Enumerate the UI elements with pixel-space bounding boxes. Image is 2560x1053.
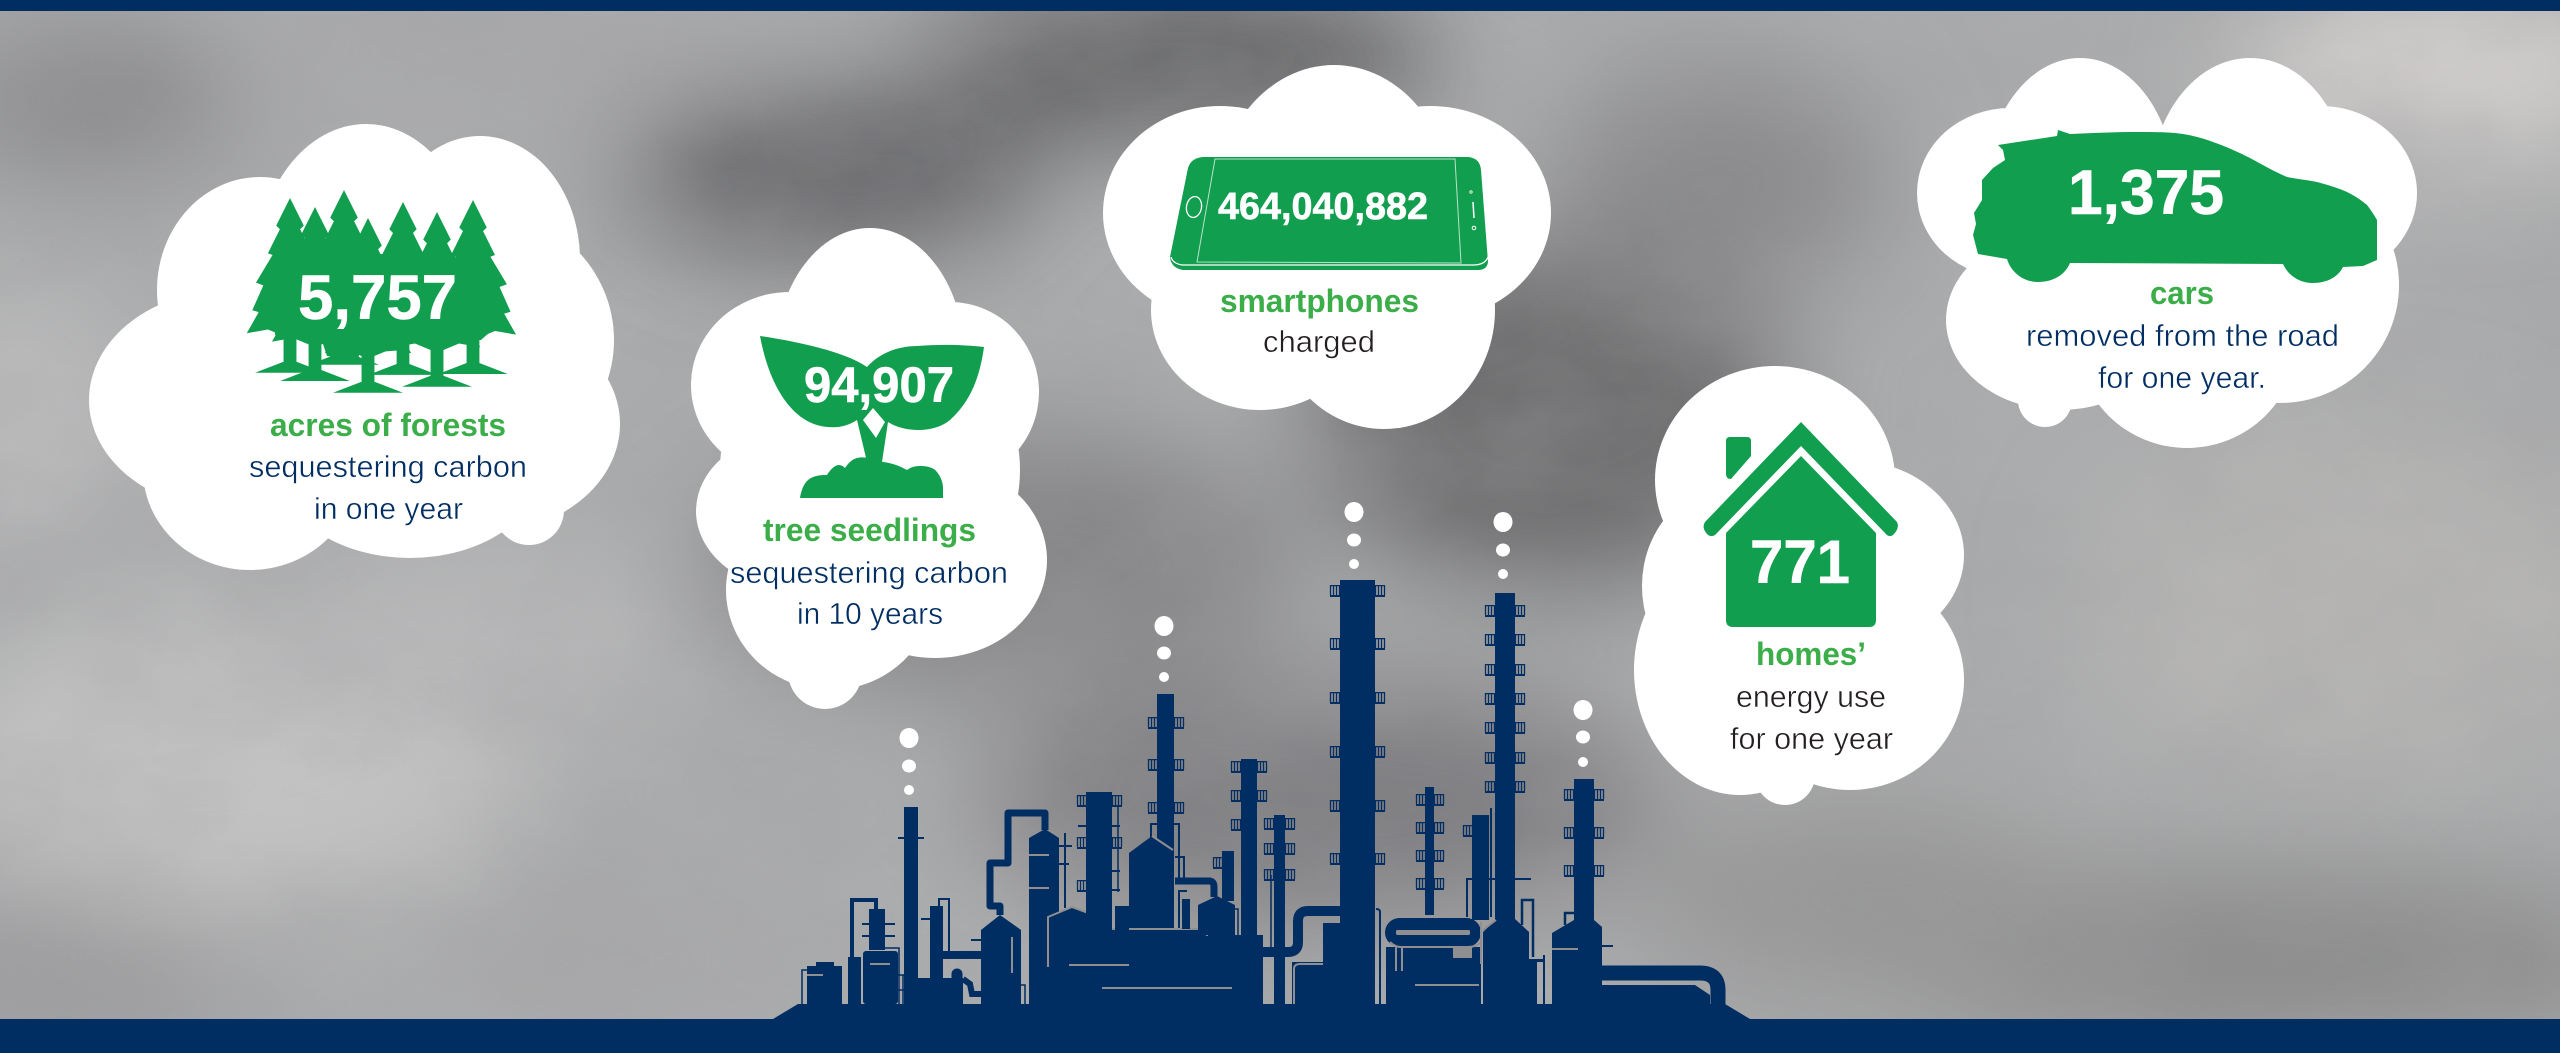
- text: sequestering carbon: sequestering carbon: [730, 555, 1008, 590]
- icon: car silhouette: [1973, 130, 2377, 283]
- icon: house: [1704, 422, 1898, 627]
- cloud shape: homes: [1634, 366, 1964, 805]
- icon: seedling: [760, 336, 984, 498]
- label: acres of forests: acres of forests: [270, 407, 506, 443]
- label: smartphones: smartphones: [1220, 283, 1419, 319]
- number: 771: 771: [1750, 528, 1850, 596]
- label: cars: cars: [2150, 275, 2214, 311]
- refinery: left section: [802, 807, 1235, 1004]
- number: 1,375: 1,375: [2068, 158, 2224, 228]
- text: energy use: energy use: [1736, 679, 1886, 714]
- text: removed from the road: removed from the road: [2026, 318, 2339, 353]
- factory skyline: [773, 502, 1750, 1019]
- text: for one year: for one year: [1730, 721, 1893, 756]
- text: for one year.: for one year.: [2098, 360, 2266, 395]
- panel: cars cloud: [1917, 58, 2417, 448]
- bottom navy bar: [0, 1019, 2560, 1053]
- text: in one year: in one year: [314, 491, 463, 526]
- text: in 10 years: in 10 years: [797, 596, 943, 631]
- number: 464,040,882: 464,040,882: [1218, 186, 1428, 228]
- smoke puffs: [900, 502, 1592, 795]
- panel: tree seedlings cloud: [691, 228, 1047, 709]
- number: 94,907: 94,907: [804, 357, 954, 413]
- top navy bar: [0, 0, 2560, 11]
- panel: homes cloud: [1634, 366, 1964, 805]
- number: 5,757: 5,757: [298, 263, 457, 333]
- icon: pine trees: [247, 190, 516, 393]
- label: tree seedlings: tree seedlings: [763, 512, 976, 548]
- cloud shape: seedlings: [691, 228, 1047, 709]
- cloud shape: forests: [89, 124, 620, 570]
- panel: smartphones cloud: [1103, 65, 1551, 429]
- cloud shape: cars: [1917, 58, 2417, 448]
- platforms on the stacks: [1077, 585, 1604, 892]
- panel: forests cloud: [89, 124, 620, 570]
- ground: [773, 1004, 1750, 1019]
- refinery: central towers: [1078, 580, 1380, 1009]
- refinery: right section: [1385, 593, 1718, 1004]
- icon: smartphone: [1170, 157, 1488, 270]
- cloud shape: smartphones: [1103, 65, 1551, 429]
- text: charged: charged: [1263, 324, 1375, 359]
- text: sequestering carbon: sequestering carbon: [249, 449, 527, 484]
- label: homes': homes’: [1756, 636, 1866, 672]
